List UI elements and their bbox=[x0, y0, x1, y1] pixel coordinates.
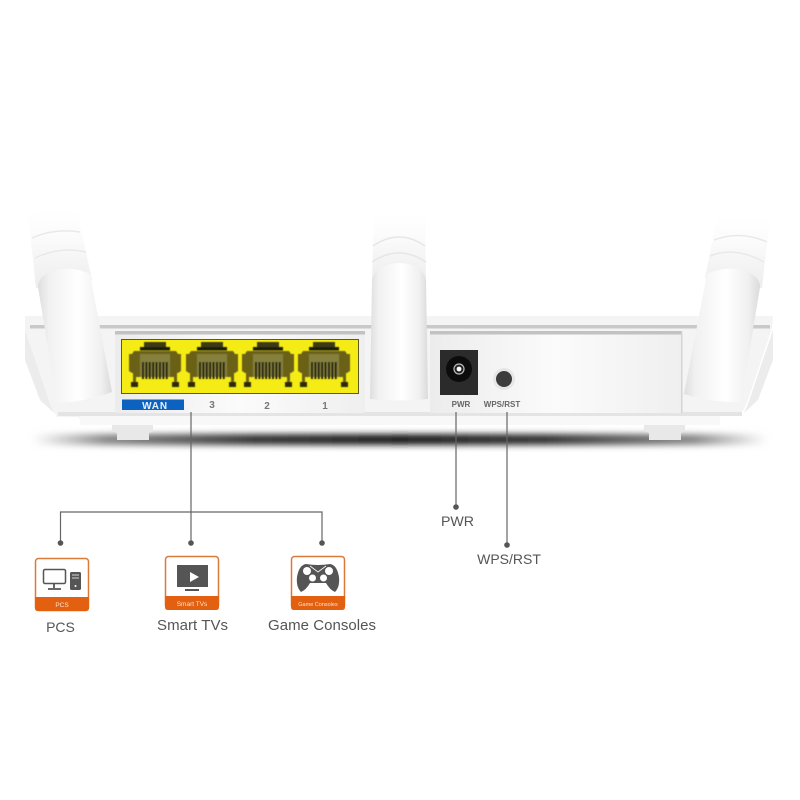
router body bbox=[25, 316, 773, 425]
callout: WPS/RST bbox=[477, 412, 541, 567]
icon: Smart TVs bbox=[165, 556, 219, 610]
WPS/RST button bbox=[493, 368, 515, 390]
yellow ethernet panel bbox=[122, 340, 358, 394]
icon: Game Consoles: Game Consoles bbox=[298, 602, 338, 608]
label: Smart TVs: Smart TVs bbox=[157, 617, 228, 634]
icon: PCS: PCS bbox=[55, 602, 69, 609]
callout: PWR bbox=[441, 412, 474, 530]
right recessed panel bbox=[430, 331, 682, 413]
antenna: right bbox=[684, 217, 770, 402]
panel labels bbox=[452, 400, 520, 409]
connector dot: Game Consoles bbox=[319, 540, 325, 546]
port: WAN bbox=[129, 342, 181, 387]
label: Game Consoles: Game Consoles bbox=[268, 617, 376, 634]
port numbers: 2 bbox=[264, 401, 270, 412]
left recessed port bay bbox=[115, 331, 365, 413]
callout: PWR: PWR bbox=[441, 514, 474, 530]
panel labels: PWR bbox=[452, 400, 471, 409]
connector dot: PCS bbox=[58, 540, 63, 546]
power jack bbox=[440, 350, 478, 395]
connector dot: Smart TVs bbox=[188, 540, 194, 546]
icon: Smart TVs: Smart TVs bbox=[177, 601, 208, 608]
icon: Game Consoles bbox=[291, 556, 345, 610]
connector lines: LAN devices bbox=[60, 412, 322, 543]
port 1 bbox=[298, 342, 350, 387]
WAN label bbox=[122, 400, 184, 412]
feet bbox=[112, 425, 685, 440]
callout: WPS/RST: WPS/RST bbox=[477, 551, 541, 567]
label: PCS: PCS bbox=[46, 619, 75, 635]
WAN label: WAN bbox=[142, 401, 168, 412]
port numbers: 3 bbox=[209, 400, 215, 411]
icon: PCS bbox=[35, 558, 89, 611]
port numbers bbox=[209, 400, 328, 412]
antenna: center bbox=[370, 214, 428, 400]
panel labels: WPS/RST bbox=[484, 400, 520, 409]
port 3 bbox=[186, 342, 238, 387]
port numbers: 1 bbox=[322, 401, 328, 412]
floor shadow bbox=[32, 434, 768, 445]
port 2 bbox=[242, 342, 294, 387]
antenna: left bbox=[28, 210, 112, 403]
